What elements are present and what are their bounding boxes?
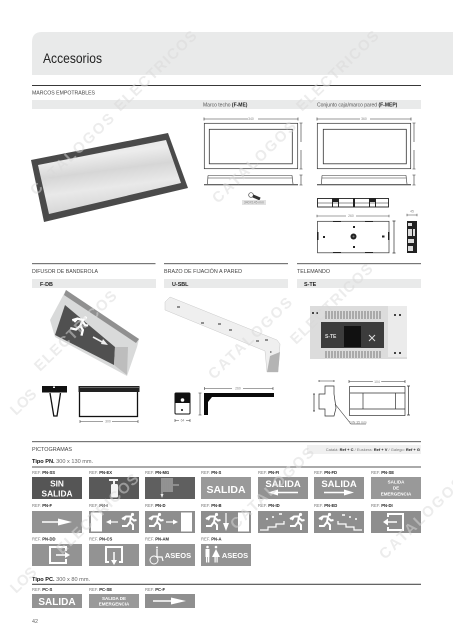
ref: PN-SS: REF. PN-SS	[32, 470, 55, 475]
section label: MARCOS EMPOTRABLES	[32, 90, 95, 96]
ref: PC-S: REF. PC-S	[32, 587, 52, 592]
ref: PN-MG: REF. PN-MG	[145, 470, 169, 475]
watermarks: ELECTRICOS	[53, 471, 142, 558]
type heading: PC: Tipo PC. 300 x 80 mm.	[32, 577, 90, 583]
sign: PN-DD	[32, 544, 82, 566]
sign: PN-F	[32, 511, 82, 533]
sign: PN-ID	[258, 511, 308, 533]
sign: PC-SE: EMERGENCIA	[99, 602, 130, 606]
ref: PN-D: REF. PN-D	[145, 503, 166, 508]
sign: PN-I	[89, 511, 139, 533]
photo: wall bracket	[165, 297, 280, 372]
drawing: bracket end view: 64	[181, 419, 184, 423]
sign: PN-ED	[314, 511, 364, 533]
product code: F-DB	[40, 282, 53, 288]
watermarks: CATALOGOS	[27, 110, 118, 199]
section rule	[297, 263, 421, 264]
photo: remote control unit: S-TE	[325, 334, 337, 340]
sign: PN-S	[201, 477, 251, 499]
ref: PN-DI: REF. PN-DI	[371, 503, 393, 508]
watermarks: CATALOGOS	[209, 118, 300, 207]
sign: PN-SE: DE	[393, 486, 399, 490]
sign: PN-DI	[371, 511, 421, 533]
watermarks: CATALOGOS	[205, 294, 296, 383]
ref: PN-A: REF. PN-A	[201, 536, 222, 542]
sign: PN-FI: SALIDA	[265, 479, 301, 490]
watermarks: LOS	[7, 386, 40, 419]
watermarks: ELECTRICOS	[287, 261, 376, 348]
sign: PN-SE	[371, 477, 421, 499]
sign: PN-FI	[258, 477, 308, 499]
ref: PN-I: REF. PN-I	[89, 503, 108, 508]
ref: PN-FI: REF. PN-FI	[258, 470, 279, 475]
sign: PN-CS	[89, 544, 139, 566]
header band	[32, 32, 453, 75]
sign: PC-SE: SALIDA DE	[102, 596, 126, 601]
watermarks: ELECTRICOS	[293, 28, 382, 115]
icon: cut-out key	[242, 193, 266, 205]
ref: PN-F: REF. PN-F	[32, 503, 52, 508]
drawing: lamp front view	[78, 386, 140, 424]
sign: PC-F	[145, 594, 195, 608]
section rule	[32, 263, 156, 264]
product code: U-SBL	[172, 282, 189, 288]
model label: F-ME: Marco techo (F-ME)	[203, 103, 248, 109]
drawing: bracket end view	[175, 393, 190, 423]
drawing: mounting box	[317, 198, 417, 253]
ref: PN-DD: REF. PN-DD	[32, 536, 56, 542]
photo: remote control unit	[310, 306, 407, 359]
section: telemando	[297, 263, 421, 424]
sign: PN-SS: SIN	[50, 478, 64, 488]
drawing: F-MEP dimensions	[317, 118, 416, 185]
sign: PC-S: SALIDA	[38, 597, 76, 608]
top rule	[32, 84, 421, 87]
sign: PN-MG	[145, 477, 195, 499]
section: difusor de banderola	[32, 263, 156, 424]
page number: 42	[32, 619, 38, 625]
drawing: F-ME dimensions	[204, 118, 302, 185]
ref: PN-B: REF. PN-B	[201, 503, 222, 508]
sign: PN-EX	[89, 477, 139, 499]
dimension: 340: 340	[248, 117, 254, 121]
watermarks: ELECTRICOS	[31, 288, 120, 375]
rule	[32, 583, 421, 586]
section label: DIFUSOR DE BANDEROLA	[32, 269, 98, 275]
ref: PC-F: REF. PC-F	[145, 587, 165, 592]
product code: S-TE	[304, 282, 317, 288]
section: marcos empotrables	[31, 90, 421, 253]
grey code band	[164, 279, 288, 288]
grey label band	[32, 100, 421, 109]
drawing: lamp end view	[42, 386, 67, 416]
drawing: bracket side view	[198, 387, 274, 415]
sign: PN-FD: SALIDA	[321, 479, 357, 490]
section: brazo de fijacion	[164, 263, 288, 423]
grey code band	[32, 279, 156, 288]
drawing: DIN rail profile	[313, 380, 366, 424]
section rule	[32, 441, 421, 442]
sign: PN-A	[201, 544, 251, 566]
ref: PN-ID: REF. PN-ID	[258, 503, 280, 508]
ref: PN-EX: REF. PN-EX	[89, 470, 112, 475]
ref: PN-SE: REF. PN-SE	[371, 470, 394, 475]
drawing: bracket side view: 260	[235, 387, 241, 391]
watermarks: LOS	[7, 564, 40, 597]
sign: PN-SS	[32, 477, 82, 499]
section label: PICTOGRAMAS	[32, 447, 72, 453]
pictograms: row 1	[32, 470, 421, 499]
drawing: mounting box: 45	[410, 210, 414, 214]
model label: F-MEP: Conjunto caja/marco pared (F-MEP)	[317, 103, 398, 109]
grey code band	[297, 279, 421, 288]
section rule	[164, 263, 288, 264]
ref: PN-AM: REF. PN-AM	[145, 536, 169, 542]
section label: TELEMANDO	[297, 269, 330, 275]
language note: Catalá: Ref + C / Euskera: Ref + V / Galego: Ref + G	[326, 447, 420, 452]
icon: cut-out key: 340X145 mm	[244, 201, 264, 205]
ref: PN-ED: REF. PN-ED	[314, 503, 337, 508]
section label: BRAZO DE FIJACIÓN A PARED	[164, 268, 242, 275]
sign: PN-D	[145, 511, 195, 533]
sign: PN-AM	[145, 544, 195, 566]
photo: exit sign lamp	[50, 290, 139, 376]
sign: PC-S	[32, 594, 82, 608]
drawing: lamp front view: 300	[105, 420, 111, 424]
pictograms: PC row	[32, 587, 195, 608]
sign: PC-SE	[89, 594, 139, 608]
drawing: unit front view	[349, 380, 410, 416]
watermarks: ELECTRICOS	[111, 28, 200, 115]
dimension: 104: 104	[374, 380, 380, 384]
pictograms: row 3	[32, 536, 251, 566]
title: Accesorios	[43, 50, 102, 66]
ref: PN-CS: REF. PN-CS	[89, 536, 112, 542]
dimension: DIN rail: DIN 35 mm	[349, 420, 367, 424]
sign: PN-A: ASEOS	[222, 551, 248, 560]
pictograms: row 2	[32, 503, 421, 533]
type heading: PN: Tipo PN. 300 x 130 mm.	[32, 459, 94, 465]
language note band	[307, 445, 421, 454]
watermarks: CATALOGOS	[227, 444, 318, 533]
ref: PN-S: REF. PN-S	[201, 470, 221, 475]
sign: PN-SE: SALIDA	[388, 480, 405, 484]
sign: PN-AM: ASEOS	[165, 551, 191, 560]
photo: recessed frame	[31, 133, 188, 222]
sign: PN-FD	[314, 477, 364, 499]
sign: PN-SE: EMERGENCIA	[381, 492, 412, 496]
drawing: mounting box: 260	[348, 214, 354, 218]
ref: PC-SE: REF. PC-SE	[89, 587, 112, 592]
sign: PN-S: SALIDA	[206, 484, 246, 496]
sign: PN-SS: SALIDA	[42, 488, 72, 498]
section heading: pictogramas	[32, 441, 421, 468]
section rule	[32, 466, 421, 468]
dimension: 360: 360	[361, 117, 367, 121]
sign: PN-B	[201, 511, 251, 533]
ref: PN-FD: REF. PN-FD	[314, 470, 337, 475]
